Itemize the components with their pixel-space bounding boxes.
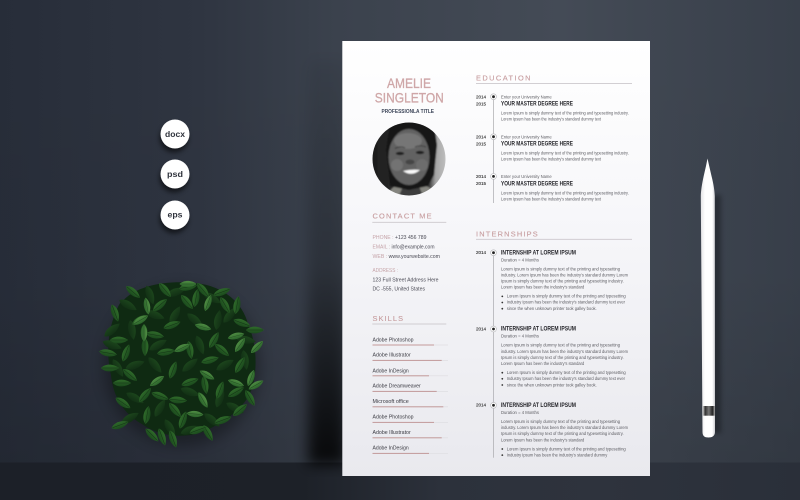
education entry 1: 2015	[476, 101, 486, 106]
internship entry 1: Lorem Ipsum is simply dummy text of the printing and typesetting	[507, 294, 626, 299]
paper shadow	[308, 60, 346, 465]
portrait photo	[372, 122, 446, 196]
education entry 3: YOUR MASTER DEGREE HERE	[501, 181, 573, 187]
internship entry 3: industry. Lorem Ipsum has been the industry's standard dummy Lorem	[501, 425, 628, 430]
education section	[476, 74, 632, 203]
education entry 2	[476, 134, 629, 162]
internship entry 3: Industry Ipsum has been the industry's standard dummy	[507, 452, 608, 457]
internship entry 2: INTERNSHIP AT LOREM IPSUM	[501, 327, 576, 333]
education entry 1: Enter your University Name	[501, 94, 552, 100]
internship entry 1	[476, 250, 628, 311]
internship entry 2: Lorem Ipsum is simply dummy text of the printing and typesetting	[501, 343, 620, 348]
skill list with bars: Adobe Photoshop	[372, 337, 414, 343]
internship entry 2: Ipsum is simply dummy text of the printing and typesetting industry.	[501, 355, 624, 360]
education entry 1	[476, 94, 629, 122]
internship entry 2: Industry Ipsum has been the industry's standard dummy text ever	[507, 376, 625, 381]
internship entry 3: Duration = 4 Months	[501, 410, 540, 415]
internships heading: INTERNSHIPS	[476, 229, 538, 238]
internship entry 1: Lorem Ipsum has been the industry's standard	[501, 285, 585, 290]
internship entry 3: Lorem Ipsum is simply dummy text of the printing and typesetting	[501, 419, 620, 424]
skill list with bars: Adobe InDesign	[372, 446, 409, 452]
address label: ADDRESS :	[372, 268, 398, 274]
badge: docx: docx	[165, 129, 185, 139]
internship entry 2: Lorem Ipsum has been the industry's standard	[501, 361, 585, 366]
education entry 3: Lorem Ipsum has been the industry's standard dummy text	[501, 196, 602, 201]
internship entry 1: Industry Ipsum has been the industry's standard dummy text ever	[507, 300, 625, 305]
education heading: EDUCATION	[476, 74, 530, 83]
name heading	[375, 75, 444, 106]
skill list with bars: Adobe Dreamweaver	[372, 384, 421, 390]
internship entry 2	[476, 326, 628, 387]
internship entry 3: Lorem Ipsum is simply dummy text of the printing and typesetting	[507, 446, 626, 451]
education entry 2: Enter your University Name	[501, 134, 552, 140]
internship entry 3: Ipsum is simply dummy text of the printing and typesetting industry.	[501, 431, 624, 436]
phone: PHONE : +123 456 789	[372, 235, 427, 241]
contact section	[372, 212, 446, 293]
skill list with bars	[372, 337, 448, 454]
internship entry 3: INTERNSHIP AT LOREM IPSUM	[501, 403, 576, 409]
website: WEB : www.yourwebsite.com	[372, 254, 440, 260]
floor	[0, 462, 800, 500]
potted plant from above	[99, 281, 265, 449]
internship entry 1: Ipsum is simply dummy text of the printing and typesetting industry.	[501, 278, 624, 284]
education entry 3: Enter your University Name	[501, 174, 552, 179]
education entry 2: Lorem Ipsum has been the industry's standard dummy text	[501, 157, 602, 162]
skill list with bars: Microsoft office	[372, 399, 409, 405]
internship entry 1: INTERNSHIP AT LOREM IPSUM	[501, 250, 576, 256]
education entry 2: 2015	[476, 141, 486, 146]
education entry 1: 2014	[476, 94, 486, 99]
badge: psd: psd	[167, 169, 183, 179]
education entry 2: Lorem Ipsum is simply dummy text of the printing and typesetting industry.	[501, 151, 629, 156]
name heading: SINGLETON	[375, 90, 444, 106]
contact heading: CONTACT ME	[372, 212, 432, 221]
internships section	[476, 229, 632, 458]
professional title: PROFESSIONLA TITLE	[382, 109, 434, 115]
education entry 2: YOUR MASTER DEGREE HERE	[501, 142, 573, 148]
internship entry 1: Duration = 4 Months	[501, 257, 540, 262]
education entry 2: 2014	[476, 134, 486, 139]
internship entry 1: since the when unknown printer took galley book.	[507, 306, 597, 311]
internship entry 1: 2014	[476, 250, 486, 255]
education entry 3	[476, 174, 629, 201]
name heading: AMELIE	[387, 75, 431, 91]
education entry 1: Lorem Ipsum is simply dummy text of the printing and typesetting industry.	[501, 111, 629, 116]
stylus pencil	[701, 158, 721, 438]
address lines: DC -555, United States	[372, 287, 426, 293]
internship entry 2: Lorem Ipsum is simply dummy text of the printing and typesetting	[507, 370, 626, 375]
skill list with bars: Adobe Photoshop	[372, 414, 414, 420]
internship entry 3	[476, 402, 628, 457]
skill list with bars: Adobe InDesign	[372, 368, 409, 374]
file format badges	[160, 120, 190, 234]
pencil metal band	[703, 406, 715, 416]
education entry 1: YOUR MASTER DEGREE HERE	[501, 102, 573, 108]
education entry 3: 2015	[476, 181, 486, 186]
badge: eps: eps	[168, 210, 183, 220]
education entry 3: Lorem Ipsum is simply dummy text of the printing and typesetting industry.	[501, 190, 629, 195]
address lines: 123 Full Street Address Here	[372, 277, 439, 283]
resume sheet	[342, 41, 650, 476]
email: EMAIL : info@example.com	[372, 245, 434, 251]
internship entry 2: industry. Lorem Ipsum has been the industry's standard dummy Lorem	[501, 349, 628, 354]
internship entry 2: since the when unknown printer took galley book.	[507, 382, 597, 387]
skill list with bars: Adobe Illustrator	[372, 353, 411, 359]
skill list with bars: Adobe Illustrator	[372, 430, 411, 436]
internship entry 1: industry. Lorem Ipsum has been the industry's standard dummy Lorem	[501, 272, 628, 278]
skills heading: SKILLS	[372, 314, 403, 323]
skills section	[372, 314, 448, 454]
internship entry 2: 2014	[476, 326, 486, 331]
internship entry 3: Lorem Ipsum has been the industry's standard	[501, 437, 585, 442]
education entry 1: Lorem Ipsum has been the industry's standard dummy text	[501, 117, 602, 122]
address lines	[372, 277, 439, 293]
internship entry 2: Duration = 4 Months	[501, 334, 540, 339]
internship entry 3: 2014	[476, 403, 486, 408]
education entry 3: 2014	[476, 174, 486, 179]
internship entry 1: Lorem Ipsum is simply dummy text of the printing and typesetting	[501, 266, 620, 271]
